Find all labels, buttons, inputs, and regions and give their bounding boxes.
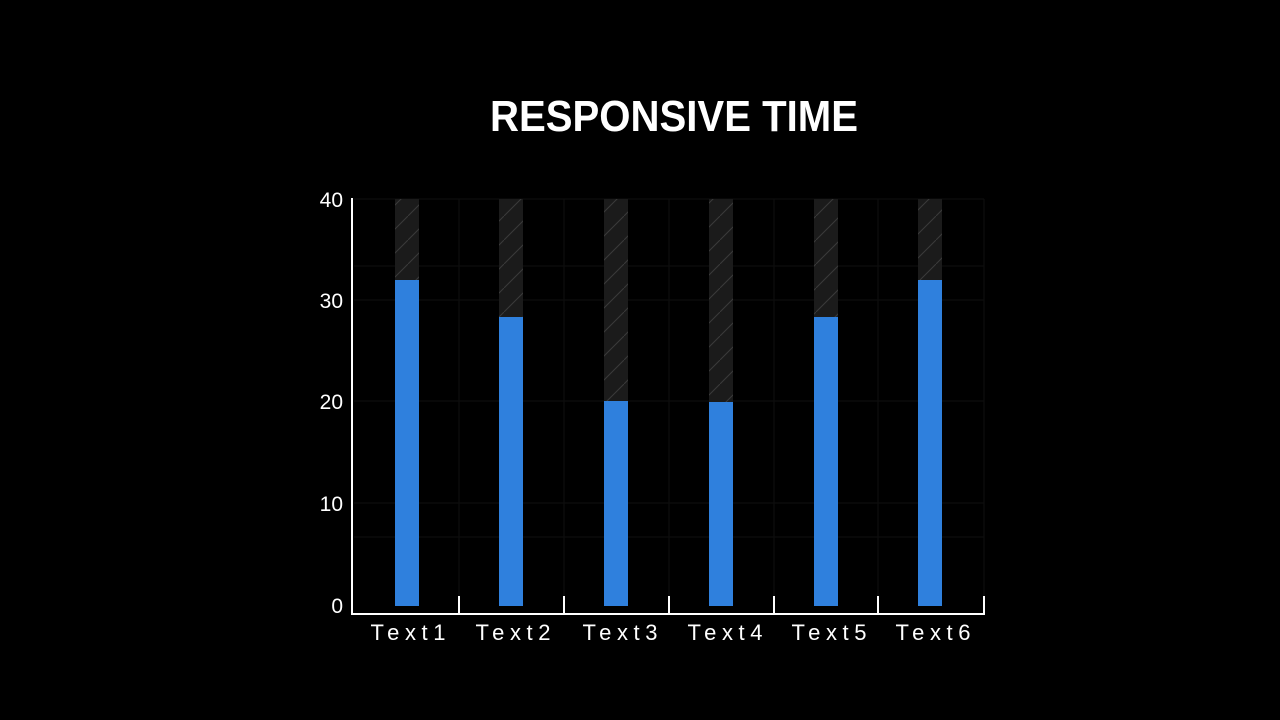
bars: [395, 199, 942, 606]
y-axis labels: 40: [320, 189, 343, 212]
axes: [351, 198, 985, 615]
bar chart: [320, 189, 985, 645]
x-axis labels: Text3: [582, 620, 658, 645]
y-axis labels: 20: [320, 391, 343, 414]
y-axis labels: 10: [320, 493, 343, 516]
x-axis labels: Text5: [792, 620, 866, 645]
x-axis labels: Text1: [370, 620, 446, 645]
x-axis labels: Text2: [476, 620, 550, 645]
x-axis labels: Text4: [688, 620, 762, 645]
y-axis labels: 30: [320, 290, 343, 313]
title: RESPONSIVE TIME: [490, 92, 858, 141]
y-axis labels: 0: [331, 595, 343, 618]
y-axis labels: [320, 189, 343, 618]
x-axis labels: [370, 620, 970, 645]
x-axis labels: Text6: [896, 620, 970, 645]
